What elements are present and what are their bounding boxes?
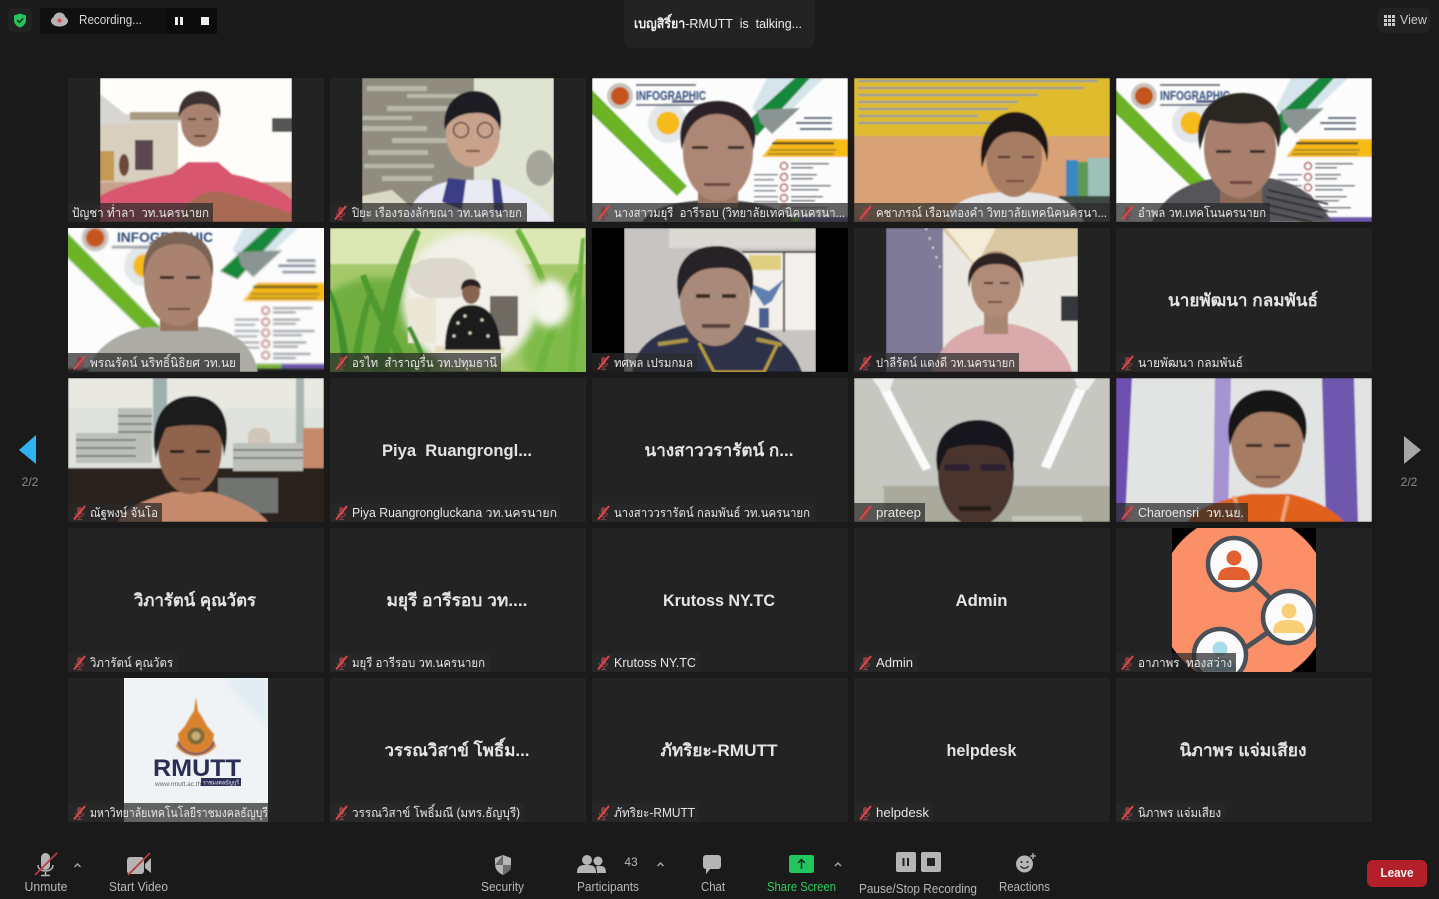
name label: ปัญชา ท่ำลา วท.นครนายก xyxy=(72,204,209,220)
display name: วรรณวิสาข์ โพธิ์ม... xyxy=(384,737,530,760)
name label: prateep xyxy=(876,506,921,520)
share screen button xyxy=(767,855,836,894)
name label xyxy=(330,503,560,522)
name label: ภัทริยะ-RMUTT xyxy=(614,806,695,820)
tile: Pornrat with infographic background xyxy=(68,228,324,372)
display name: Krutoss NY.TC xyxy=(663,591,775,610)
recording status bar: Recording... xyxy=(79,12,142,27)
display name: นิภาพร แจ่มเสียง xyxy=(1180,740,1306,760)
tile: Mayuree (no video) xyxy=(330,528,586,672)
tile: Wannawisa (no video) xyxy=(330,678,586,822)
name label: Charoensri วท.นย. xyxy=(1138,506,1244,520)
tile: Piya Ruangrongluckana (no video) xyxy=(330,378,586,522)
RMUTT logo image: www.rmutt.ac.th xyxy=(154,781,202,788)
display name: helpdesk xyxy=(946,741,1017,760)
display name: นางสาววรารัตน์ ก... xyxy=(644,440,794,460)
participants caret xyxy=(658,863,664,866)
tile: Nipaporn (no video) xyxy=(1116,678,1372,822)
name label: นางสาววรารัตน์ กลมพันธ์ วท.นครนายก xyxy=(614,506,810,520)
pause and stop recording button: Pause/Stop Recording xyxy=(859,882,977,896)
name label xyxy=(854,503,925,522)
next page arrow xyxy=(1401,436,1421,489)
name label xyxy=(854,203,1110,222)
reactions button xyxy=(999,853,1050,894)
name label: อรไท สำราญรื่น วท.ปทุมธานี xyxy=(352,354,497,371)
name label: อำพล วท.เทคโนนครนายก xyxy=(1138,205,1266,220)
person xyxy=(88,232,258,372)
RMUTT logo image: ราชมงคลธัญบุรี xyxy=(203,778,240,786)
security button: Security xyxy=(481,880,525,894)
name label: Admin xyxy=(876,656,913,670)
name label xyxy=(1116,353,1247,372)
name label: ทศพล เปรมกมล xyxy=(614,356,693,370)
reactions button: Reactions xyxy=(999,880,1050,894)
tile: Paleerat xyxy=(854,228,1110,372)
tile: Warat (no video) xyxy=(592,378,848,522)
name label xyxy=(330,353,501,372)
tile: Charoensri xyxy=(1116,378,1372,522)
name label xyxy=(1116,803,1225,822)
previous page arrow: 2/2 xyxy=(22,475,39,489)
display name: นายพัฒนา กลมพันธ์ xyxy=(1168,290,1318,310)
display name: Piya Ruangrongl... xyxy=(382,441,532,460)
name label: นิภาพร แจ่มเสียง xyxy=(1138,806,1221,820)
tile: Admin (no video) xyxy=(854,528,1110,672)
name label xyxy=(1116,503,1248,522)
tile: Kachaporn xyxy=(854,78,1110,222)
name label xyxy=(854,653,917,672)
display name: Admin xyxy=(956,591,1008,610)
poster title: INFOGRAPHIC xyxy=(117,229,213,245)
name label xyxy=(68,803,268,822)
poster title: INFOGRAPHIC xyxy=(1160,88,1230,103)
talking indicator pill xyxy=(624,0,815,48)
participants button: Participants xyxy=(577,880,639,894)
name label: วิภารัตน์ คุณวัตร xyxy=(90,656,173,671)
tile: RMUTT logo xyxy=(68,678,324,822)
view button xyxy=(1377,8,1431,33)
name label xyxy=(592,503,814,522)
name label: ปาลีรัตน์ แดงดี วท.นครนายก xyxy=(876,356,1015,370)
name label: ณัฐพงษ์ จันโอ xyxy=(90,505,158,520)
name label: พรณรัตน์ นริทธิ์นิธิยศ วท.นย xyxy=(90,353,236,370)
name label xyxy=(330,803,524,822)
leave button: Leave xyxy=(1380,865,1414,880)
name label: Krutoss NY.TC xyxy=(614,656,696,670)
start video button: Start Video xyxy=(109,880,168,894)
tile: Thotsaphon xyxy=(592,228,848,372)
next page arrow: 2/2 xyxy=(1401,475,1418,489)
tile: Orathai grass background xyxy=(330,228,586,372)
name label: มยุรี อารีรอบ วท.นครนายก xyxy=(352,656,485,671)
tile: Wiparat (no video) xyxy=(68,528,324,672)
security button xyxy=(481,855,525,894)
tile: prateep xyxy=(854,378,1110,522)
name label xyxy=(854,803,933,822)
pause and stop recording button xyxy=(859,852,977,896)
recording status bar xyxy=(40,8,217,34)
name label: helpdesk xyxy=(876,806,930,820)
RMUTT logo image: RMUTT xyxy=(153,755,241,782)
person xyxy=(642,101,794,222)
name label xyxy=(330,653,489,672)
display name: ภัทริยะ-RMUTT xyxy=(660,741,778,760)
name label: อาภาพร ทองสว่าง xyxy=(1138,656,1232,670)
name label xyxy=(1116,653,1236,672)
name label xyxy=(592,353,697,372)
name label xyxy=(68,353,240,372)
unmute button xyxy=(24,853,68,894)
name label xyxy=(330,203,527,222)
display name: วิภารัตน์ คุณวัตร xyxy=(134,590,257,611)
emblem xyxy=(176,697,216,756)
name label xyxy=(592,803,699,822)
share options caret xyxy=(835,863,841,866)
tile: Nattapong xyxy=(68,378,324,522)
leave button xyxy=(1367,860,1427,887)
tile: Krutoss NY.TC (no video) xyxy=(592,528,848,672)
name label: Piya Ruangrongluckana วท.นครนายก xyxy=(352,506,557,520)
tile: Apaporn avatar xyxy=(1116,528,1372,672)
security shield badge xyxy=(8,8,32,32)
name label xyxy=(68,503,162,522)
start video button xyxy=(109,853,168,894)
chat button xyxy=(701,855,725,894)
name label: ปิยะ เรืองรองลักขณา วท.นครนายก xyxy=(352,206,522,220)
audio options caret xyxy=(74,864,80,867)
name label xyxy=(68,203,213,222)
display name: มยุรี อารีรอบ วท.... xyxy=(386,590,528,611)
name label xyxy=(68,653,177,672)
name label: นายพัฒนา กลมพันธ์ xyxy=(1138,356,1243,370)
tile: helpdesk (no video) xyxy=(854,678,1110,822)
tile: Pattriya-RMUTT (no video) xyxy=(592,678,848,822)
name label xyxy=(854,353,1019,372)
tile: Banyacha xyxy=(68,78,324,222)
RMUTT logo image xyxy=(124,678,268,822)
tile: Pattana (no video) xyxy=(1116,228,1372,372)
tile: Ampol with infographic background xyxy=(1116,78,1372,222)
tile: Piya webcam xyxy=(330,78,586,222)
name label xyxy=(592,203,848,222)
network avatar image xyxy=(1172,528,1316,672)
talking indicator pill: เบญสิริ์ยา-RMUTT is talking... xyxy=(634,13,802,32)
share screen button: Share Screen xyxy=(767,880,836,894)
unmute button: Unmute xyxy=(24,880,68,894)
participants button: 43 xyxy=(624,855,638,869)
participants button xyxy=(577,855,639,894)
view button: View xyxy=(1400,13,1428,27)
previous page arrow xyxy=(19,435,39,489)
person xyxy=(1152,93,1332,222)
name label xyxy=(1116,203,1270,222)
poster title: INFOGRAPHIC xyxy=(636,88,706,103)
chat button: Chat xyxy=(701,880,725,894)
name label xyxy=(592,653,700,672)
name label: มหาวิทยาลัยเทคโนโลยีราชมงคลธัญบุรี xyxy=(90,805,268,821)
name label: วรรณวิสาข์ โพธิ์มณี (มทร.ธัญบุรี) xyxy=(352,803,520,821)
tile: Mayuree with infographic background xyxy=(592,78,848,222)
